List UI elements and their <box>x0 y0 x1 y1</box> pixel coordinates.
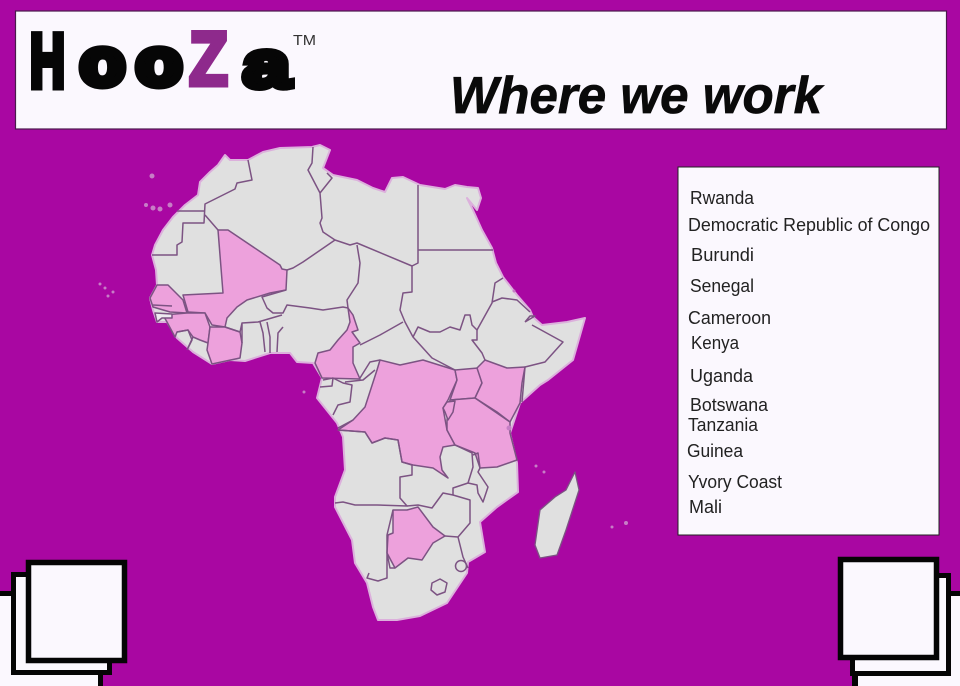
country: Kenya <box>475 360 525 422</box>
country: Botswana <box>387 507 445 568</box>
panel: country list: Guinea <box>687 441 744 461</box>
logo: TM <box>293 32 316 49</box>
logo <box>30 17 316 104</box>
panel: country list: Uganda <box>690 366 754 386</box>
country: Tanzania <box>447 398 517 468</box>
panel: country list: Kenya <box>691 333 740 353</box>
panel: country list: Senegal <box>690 276 754 296</box>
highlighted countries <box>150 230 525 568</box>
country: Senegal <box>150 285 187 313</box>
country: Ivory Coast <box>207 327 242 364</box>
panel: country list: Yvory Coast <box>688 472 782 492</box>
logo: o <box>136 25 182 99</box>
logo: H <box>30 19 65 104</box>
country: Mali <box>183 230 287 327</box>
logo: a <box>243 27 292 101</box>
country: Rwanda and Burundi <box>443 401 455 420</box>
map of Africa <box>99 145 628 620</box>
panel: country list: Botswana <box>690 395 769 415</box>
logo: o <box>80 25 125 99</box>
corner decoration: bottom right <box>840 560 960 686</box>
country: Uganda <box>450 368 482 400</box>
continent landmass <box>150 145 585 620</box>
country: Cameroon <box>315 308 360 379</box>
country: Democratic Republic of Congo <box>338 360 457 478</box>
panel: country list: Mali <box>689 497 722 517</box>
panel: country list: Tanzania <box>688 415 759 435</box>
country borders <box>152 147 563 595</box>
header panel <box>16 11 946 129</box>
small islands <box>99 174 628 528</box>
island: Madagascar <box>535 472 579 558</box>
panel: country list: Democratic Republic of Congo <box>688 215 930 235</box>
title: Where we work <box>450 67 825 125</box>
panel: country list: Burundi <box>691 245 754 265</box>
corner decoration: bottom left <box>0 562 124 686</box>
country: Guinea <box>163 313 210 343</box>
panel: country list: Rwanda <box>690 188 755 208</box>
logo: Z <box>189 17 228 102</box>
panel: country list <box>678 167 939 535</box>
panel: country list: Cameroon <box>688 308 771 328</box>
